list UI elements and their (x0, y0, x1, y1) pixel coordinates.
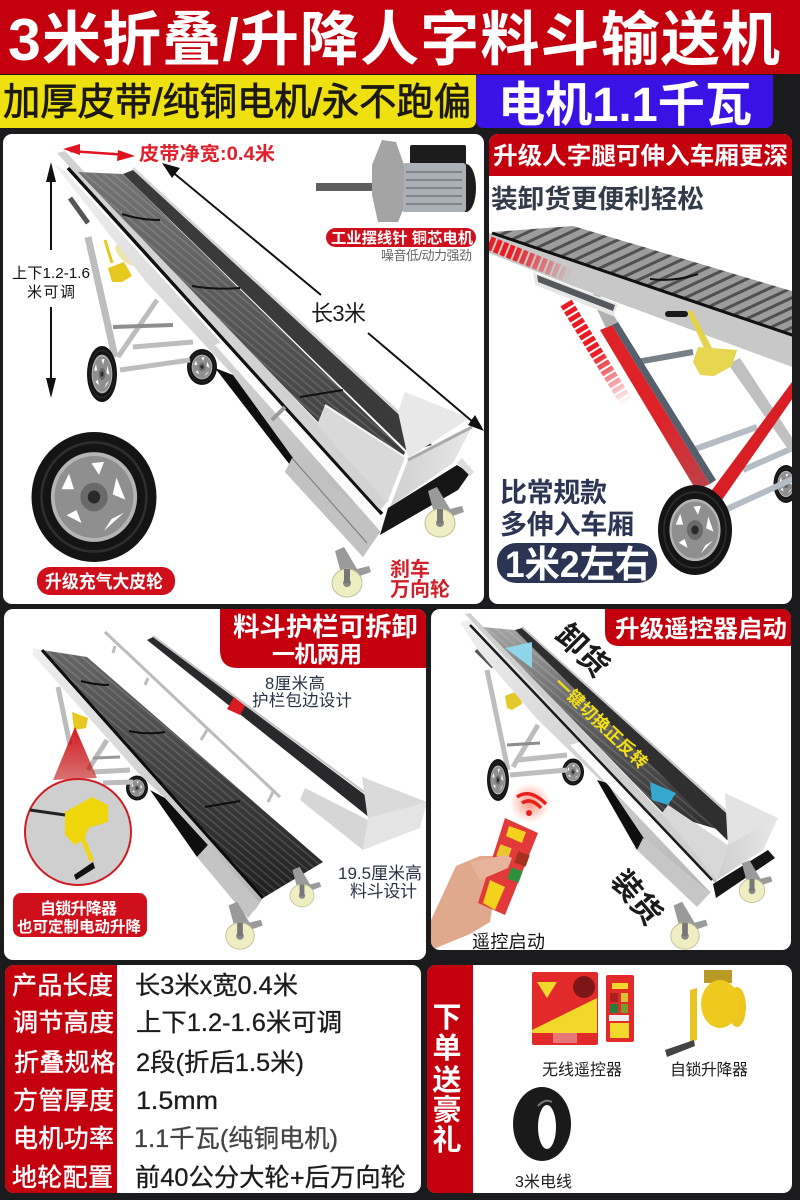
red chevrons on beam (489, 243, 570, 276)
hopper height label (338, 864, 422, 901)
white rail strip (215, 340, 387, 532)
white strip (570, 742, 716, 892)
belt width label: 皮带净宽:0.4米 (139, 142, 275, 165)
caster label: 万向轮 (390, 578, 450, 601)
spec labels: 电机功率 (13, 1125, 114, 1153)
spec labels: 方管厚度 (13, 1087, 114, 1115)
dark side wall (515, 628, 745, 840)
remote label: 遥控启动 (472, 932, 545, 952)
callout lines (500, 478, 634, 540)
caster label (390, 557, 450, 601)
black guard strip (147, 637, 388, 818)
hopper (317, 392, 474, 535)
zoom cone (53, 727, 97, 780)
gift title column: 豪 (432, 1094, 462, 1127)
title banner: 3米折叠/升降人字料斗输送机 (8, 7, 780, 73)
big wheel image (32, 432, 156, 562)
belt cleats (122, 214, 343, 397)
wifi signal icon (510, 783, 550, 823)
header tab (220, 609, 426, 668)
casters (226, 902, 263, 949)
spec labels (12, 972, 115, 1192)
under-belt wedge (597, 780, 645, 850)
gift: wire coil (513, 1087, 571, 1161)
callout lines: 比常规款 (500, 478, 607, 508)
top rail (57, 151, 389, 510)
detached hopper (300, 777, 427, 850)
black edge line (68, 168, 382, 514)
callout lines: 多伸入车厢 (500, 510, 634, 540)
gift title column: 送 (432, 1064, 462, 1097)
lower box (637, 838, 710, 907)
frame legs (487, 670, 567, 775)
header bar (489, 134, 792, 176)
header tab (605, 609, 791, 646)
hand (431, 856, 512, 950)
lower slide bar (476, 650, 493, 667)
winch label pill: 也可定制电动升降 (17, 917, 141, 936)
yellow feature strip: 加厚皮带/纯铜电机/永不跑偏 (3, 82, 471, 124)
hopper (662, 793, 778, 898)
guard height label (252, 674, 352, 710)
hopper height label: 19.5厘米高 (338, 864, 422, 883)
panel: extended legs (489, 134, 798, 604)
gift title column: 礼 (432, 1124, 462, 1157)
header tab: 一机两用 (272, 641, 362, 667)
gift: wireless control box (532, 972, 598, 1045)
red chevron arrow strip (566, 303, 627, 403)
rear wheel (187, 349, 217, 385)
yellow winch (72, 712, 88, 730)
gift title column (427, 965, 473, 1193)
under-belt black wedge (215, 368, 293, 465)
motor sub label: 噪音低/动力强劲 (381, 248, 472, 263)
belt surface (78, 172, 405, 495)
callout pill: 1米2左右 (505, 544, 650, 585)
gift: winch (665, 970, 746, 1057)
blue direction arrows (505, 642, 676, 805)
front wheel (87, 346, 117, 402)
gift title column: 下 (432, 1002, 462, 1034)
wheel label pill (37, 567, 175, 595)
lower slide bar (70, 198, 88, 223)
caster label: 刹车 (390, 557, 430, 581)
belt surface (42, 650, 323, 898)
spec values: 1.1千瓦(纯铜电机) (134, 1125, 338, 1153)
guard height marker (227, 697, 245, 715)
panel: main conveyor dimensions (3, 134, 484, 604)
height label: 上下1.2-1.6 (12, 265, 90, 282)
top rail (465, 613, 722, 880)
hinge bracket (592, 294, 618, 328)
red leg rear (712, 378, 795, 500)
yellow winch (105, 240, 140, 282)
gift title column: 单 (432, 1032, 462, 1065)
panel: remote control (431, 609, 791, 952)
winch and handle (665, 310, 737, 376)
silver leg (728, 358, 795, 452)
header tab: 升级遥控器启动 (615, 616, 787, 643)
spec labels: 产品长度 (12, 972, 113, 1000)
beam (489, 233, 795, 368)
side beam (55, 165, 385, 557)
frame legs (58, 687, 133, 783)
spec label column (5, 965, 117, 1193)
load label: 装货 (604, 864, 668, 932)
lower box section (285, 458, 385, 557)
yellow winch (505, 690, 522, 710)
gift: winch label: 自锁升降器 (670, 1061, 748, 1079)
height arrow (46, 162, 56, 398)
belt ridges (483, 627, 720, 830)
rear wheel (126, 776, 148, 800)
header bar: 升级人字腿可伸入车厢更深 (493, 143, 788, 170)
under-belt wedge (150, 790, 208, 857)
length label: 长3米 (311, 301, 366, 326)
belt surface (492, 226, 795, 335)
belt text: 一键切换正反转 (550, 674, 651, 773)
spec values: 上下1.2-1.6米可调 (136, 1009, 342, 1037)
blue motor power badge: 电机1.1千瓦 (498, 79, 752, 132)
spec labels: 折叠规格 (14, 1049, 115, 1077)
lower slide bar (533, 272, 618, 316)
winch close-up circle (25, 779, 131, 885)
belt surface (483, 627, 720, 830)
rear wheel (562, 758, 584, 786)
casters (671, 902, 708, 949)
panel: specifications table (5, 965, 421, 1193)
crossbars (637, 352, 795, 510)
hopper height label: 料斗设计 (350, 882, 417, 901)
red width arrow (63, 144, 135, 161)
conveyor frame legs (88, 237, 193, 370)
front wheel (487, 759, 509, 801)
belt ridges (42, 650, 323, 898)
lower box (197, 845, 260, 918)
spec values (134, 972, 406, 1192)
height label: 米可调 (27, 284, 75, 301)
wheel label pill: 升级充气大皮轮 (45, 571, 163, 592)
front wheel (658, 485, 732, 575)
spec values: 1.5mm (136, 1087, 218, 1115)
beam clip (272, 407, 285, 420)
gift: remote label: 无线遥控器 (542, 1061, 622, 1079)
spec labels: 地轮配置 (12, 1164, 113, 1192)
panel: free gifts (427, 965, 792, 1193)
belt cleats (81, 681, 240, 807)
header tab: 料斗护栏可拆卸 (233, 612, 418, 642)
red leg front (600, 325, 710, 490)
gift: handheld remote (606, 975, 634, 1042)
motor image (316, 140, 476, 222)
side beam (460, 620, 717, 893)
remote control (478, 818, 538, 915)
unload label: 卸货 (549, 618, 615, 684)
winch label pill: 自锁升降器 (40, 899, 117, 918)
belt ridges (78, 172, 405, 495)
thumb (470, 855, 512, 880)
rear wheel (774, 465, 792, 503)
guard rail bar (105, 632, 280, 802)
length arrow (162, 163, 484, 431)
guard height label: 8厘米高 (265, 674, 325, 693)
spec labels: 调节高度 (13, 1009, 114, 1037)
spec values: 长3米x宽0.4米 (135, 972, 298, 1000)
gift: wire label: 3米电线 (515, 1173, 572, 1191)
height label (12, 265, 90, 301)
spec values: 前40公分大轮+后万向轮 (135, 1164, 406, 1192)
panel: removable guard rails (4, 609, 427, 960)
side beam (33, 648, 263, 910)
motor label pill: 工业摆线针 铜芯电机 (331, 229, 473, 247)
sub heading: 装卸货更便利轻松 (491, 184, 704, 214)
swivel casters (332, 547, 371, 597)
spec values: 2段(折后1.5米) (136, 1049, 304, 1077)
winch label pill (13, 893, 147, 937)
dark side wall (123, 170, 432, 452)
guard height label: 护栏包边设计 (252, 691, 352, 710)
